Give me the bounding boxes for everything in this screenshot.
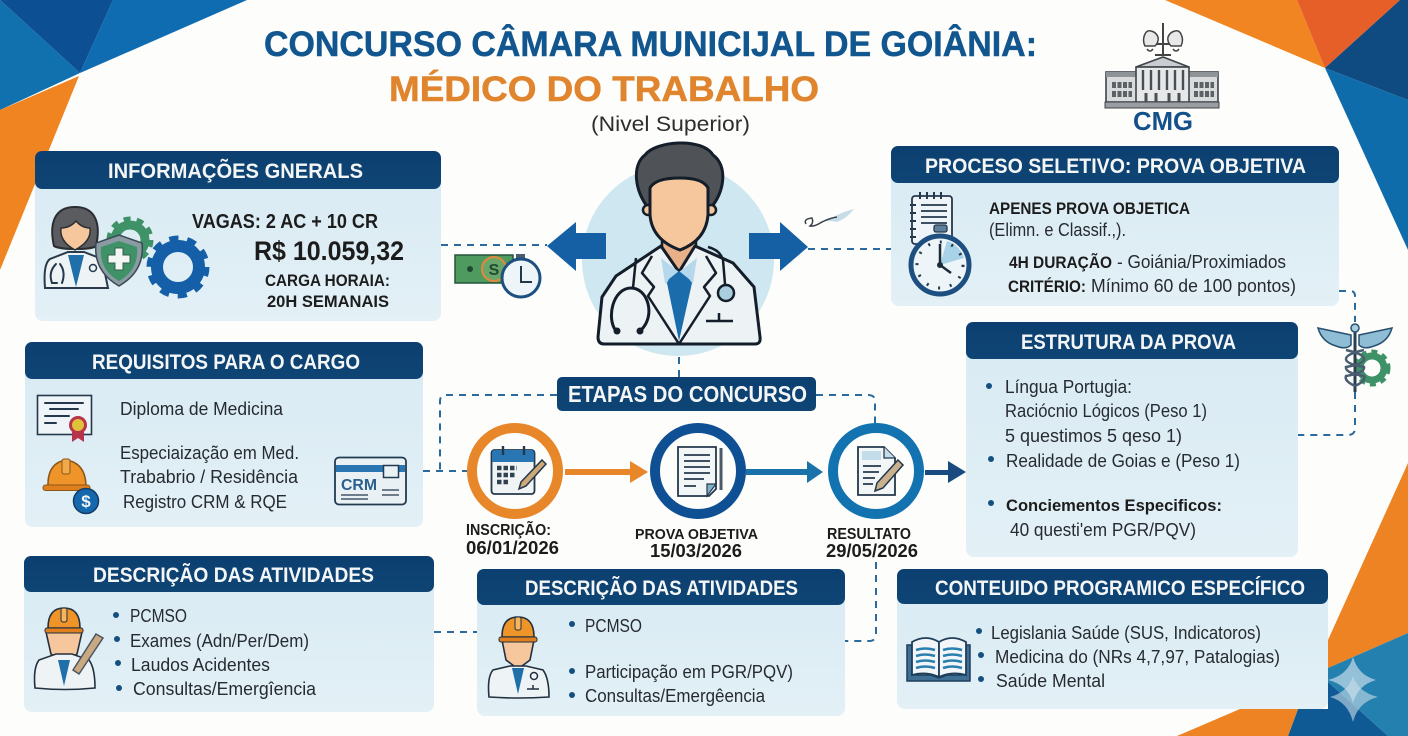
text: exam process xyxy=(989,199,1296,296)
text: exam process: - Goiánia/Proximiados xyxy=(1117,252,1286,272)
icon: woman doctor xyxy=(45,207,108,288)
heading: requisitos: REQUISITOS PARA O CARGO xyxy=(92,351,360,374)
list: activities left: PCMSO xyxy=(130,606,187,626)
icon: caduceus with gear xyxy=(1318,324,1392,392)
text: vagas, salary, workload: CARGA HORAIA: xyxy=(265,271,390,290)
text: exam process: 4H DURAÇÃO xyxy=(1009,252,1112,272)
heading: informações: INFORMAÇÕES GNERALS xyxy=(108,159,363,183)
heading: informações xyxy=(35,151,441,189)
icon: document with pencil xyxy=(858,447,903,495)
list: exam structure: Língua Portugia: xyxy=(1005,377,1132,397)
icon: hard hat with coin: $ xyxy=(81,492,91,511)
heading: conteúdo: CONTEUIDO PROGRAMICO ESPECÍFICO xyxy=(935,577,1305,600)
panel: conteúdo programático xyxy=(897,569,1328,709)
connector lines xyxy=(423,245,1355,641)
list: activities center xyxy=(569,616,793,706)
label: inscrição: 06/01/2026 xyxy=(466,538,559,558)
heading: estrutura: ESTRUTURA DA PROVA xyxy=(1021,331,1236,354)
icon: notebook and stopwatch xyxy=(910,192,969,294)
heading: descrição left xyxy=(24,556,434,592)
icon: document xyxy=(678,447,721,496)
panel: descrição das atividades (left) xyxy=(24,556,434,712)
text: requirements: Registro CRM & RQE xyxy=(123,492,287,512)
title: CONCURSO CÂMARA MUNICIJAL DE GOIÂNIA: xyxy=(264,24,1037,64)
decoration: sparkle xyxy=(1328,657,1378,722)
step: inscrição xyxy=(466,428,559,558)
list: program content: Legislania Saúde (SUS, Indicatoros) xyxy=(991,623,1261,643)
label: prova objetiva: PROVA OBJETIVA xyxy=(635,526,758,543)
list: activities center: Consultas/Emergêencia xyxy=(585,686,766,706)
panel: estrutura da prova xyxy=(966,322,1298,557)
label: inscrição xyxy=(466,519,559,558)
list: activities left xyxy=(113,606,317,699)
text: requirements: Especiaização em Med. xyxy=(120,443,299,463)
icon: shield and gears xyxy=(96,219,206,295)
text: exam process: CRITÉRIO: xyxy=(1008,277,1086,296)
list: activities center: PCMSO xyxy=(585,616,642,636)
heading: etapas do concurso: ETAPAS DO CONCURSO xyxy=(568,381,807,407)
icon: calendar xyxy=(492,446,546,494)
icon: open book xyxy=(907,638,970,681)
list: exam structure: Raciócnio Lógicos (Peso 1) xyxy=(1005,401,1207,421)
label: inscrição: INSCRIÇÃO: xyxy=(466,519,551,539)
icon: central doctor xyxy=(582,143,774,356)
text: requirements: Diploma de Medicina xyxy=(120,399,284,419)
text: requirements: Trababrio / Residência xyxy=(120,467,299,487)
list: exam structure: 5 questimos 5 qeso 1) xyxy=(1005,426,1182,446)
list: activities left: Consultas/Emergîencia xyxy=(133,679,317,699)
icon: engineer with pencil xyxy=(34,608,103,690)
title: MÉDICO DO TRABALHO xyxy=(389,69,819,109)
arrow: orange step arrow xyxy=(565,461,648,483)
label: prova objetiva xyxy=(635,526,758,561)
panel: processo seletivo xyxy=(891,146,1339,306)
decoration: top-right corner shapes xyxy=(1165,0,1408,250)
icon: CRM card: CRM xyxy=(341,477,377,494)
decoration: top-left corner shapes xyxy=(0,0,247,270)
list: activities left: Exames (Adn/Per/Dem) xyxy=(130,631,309,651)
icon: CMG building logo xyxy=(1105,23,1219,136)
text: requirements xyxy=(120,399,299,512)
list: program content xyxy=(976,623,1280,691)
list: exam structure: Conciementos Especificos: xyxy=(1006,496,1222,515)
text: vagas, salary, workload xyxy=(192,211,404,311)
text: vagas, salary, workload: R$ 10.059,32 xyxy=(254,236,404,266)
panel: descrição das atividades (center) xyxy=(477,569,845,716)
label: resultado: 29/05/2026 xyxy=(826,541,918,561)
text: exam process: (Elimn. e Classif.,). xyxy=(989,220,1126,240)
icon: diploma xyxy=(38,396,92,442)
heading: conteúdo xyxy=(897,569,1328,604)
label: resultado xyxy=(826,526,918,561)
list: program content: Medicina do (NRs 4,7,97, Patalogias) xyxy=(995,647,1280,667)
heading: estrutura xyxy=(966,322,1298,359)
arrow: blue step arrow xyxy=(746,461,823,483)
icon: CMG building logo: CMG xyxy=(1133,106,1193,136)
label: resultado: RESULTATO xyxy=(827,526,911,543)
arrow: dark step arrow xyxy=(925,461,966,483)
heading: processo xyxy=(891,146,1339,183)
step: prova objetiva xyxy=(635,428,758,561)
text: vagas, salary, workload: 20H SEMANAIS xyxy=(267,292,389,311)
step: resultado xyxy=(826,428,919,561)
title: (Nivel Superior) xyxy=(591,113,750,136)
icon: CRM card xyxy=(335,458,406,504)
heading: descrição center xyxy=(477,569,845,605)
arrow: right xyxy=(749,222,808,271)
list: exam structure: 40 questi'em PGR/PQV) xyxy=(1010,520,1196,540)
list: program content: Saúde Mental xyxy=(996,671,1105,691)
icon: hard hat with coin xyxy=(43,459,98,514)
arrow: left xyxy=(547,222,606,271)
heading: descrição left: DESCRIÇÃO DAS ATIVIDADES xyxy=(93,564,374,587)
heading: requisitos xyxy=(25,342,423,379)
list: exam structure: Realidade de Goias e (Peso 1) xyxy=(1006,451,1240,471)
list: activities left: Laudos Acidentes xyxy=(131,655,270,675)
heading: descrição center: DESCRIÇÃO DAS ATIVIDADES xyxy=(525,577,798,600)
icon: money and clock xyxy=(455,254,540,297)
panel: informações gerais xyxy=(35,151,441,321)
list: exam structure xyxy=(986,377,1240,540)
icon: swoosh xyxy=(805,209,854,226)
text: vagas, salary, workload: VAGAS: 2 AC + 10 CR xyxy=(192,211,378,233)
icon: engineer doctor xyxy=(488,617,549,698)
text: exam process: APENES PROVA OBJETICA xyxy=(989,199,1190,218)
decoration: bottom-right corner shapes xyxy=(1177,463,1408,736)
text: exam process: Mínimo 60 de 100 pontos) xyxy=(1091,276,1296,296)
label: prova objetiva: 15/03/2026 xyxy=(650,541,742,561)
list: activities center: Participação em PGR/PQV) xyxy=(585,662,793,682)
icon: money and clock: S xyxy=(489,262,500,279)
heading: etapas do concurso xyxy=(557,377,816,411)
panel: requisitos para o cargo xyxy=(25,342,423,527)
heading: processo: PROCESO SELETIVO: PROVA OBJETIVA xyxy=(925,155,1306,178)
title xyxy=(264,24,1037,136)
